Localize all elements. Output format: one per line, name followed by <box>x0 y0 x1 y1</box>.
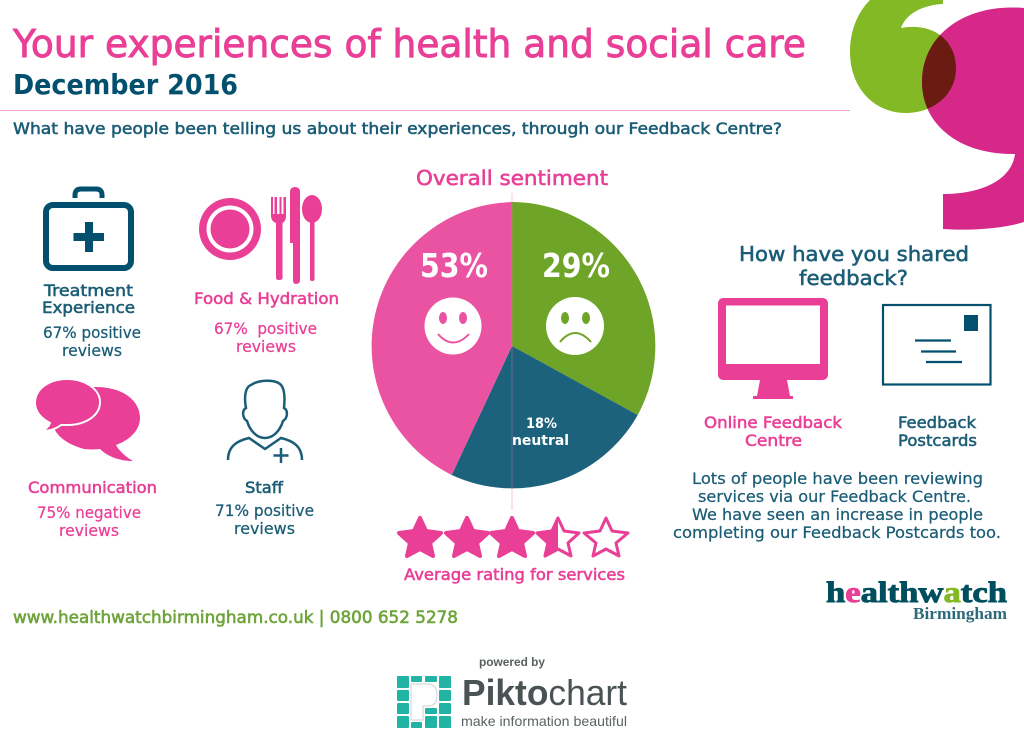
panel: food and hydration: reviews <box>236 337 296 356</box>
tagline: make information beautiful: make information beautiful <box>461 713 627 729</box>
panel: feedback postcards <box>883 305 990 450</box>
heading: how have you shared feedback: feedback? <box>799 266 908 290</box>
panel: food and hydration <box>194 187 339 356</box>
label: Feedback <box>898 413 977 432</box>
caption: powered by: powered by <box>479 655 545 669</box>
footer: powered by piktochart <box>397 655 627 729</box>
panel: treatment experience: reviews <box>62 341 122 360</box>
icon: piktochart mark <box>397 676 451 728</box>
label: Communication <box>28 478 157 497</box>
label: Online Feedback <box>704 413 843 432</box>
icon: monitor <box>718 298 828 399</box>
label: Staff <box>245 478 284 497</box>
panel: treatment experience: Experience <box>42 298 135 317</box>
label: Centre <box>745 431 802 450</box>
contact line: www.healthwatchbirmingham.co.uk | 0800 652 5278 <box>13 608 458 628</box>
caption: average rating: Average rating for services <box>404 565 625 584</box>
icon: speech bubbles <box>35 379 140 461</box>
text block: feedback summary <box>673 469 1001 542</box>
tagline: What have people been telling us about their experiences, through our Feedback Centre? <box>13 119 782 138</box>
stat: 71% positive <box>215 501 314 520</box>
icon: person with plus <box>228 381 302 463</box>
text block: feedback summary: services via our Feedback Centre. <box>698 487 971 506</box>
pie chart: sentiment <box>372 193 655 510</box>
panel: communication <box>28 379 157 540</box>
logo: healthwatch birmingham <box>826 576 1007 623</box>
stat: 67% positive <box>43 323 141 342</box>
label: Food & Hydration <box>194 289 339 308</box>
heading: overall sentiment: Overall sentiment <box>416 166 608 190</box>
panel: staff: reviews <box>234 519 295 538</box>
text block: feedback summary: Lots of people have been reviewing <box>692 469 983 488</box>
subtitle: December 2016 <box>13 68 238 101</box>
stat: 67% positive <box>214 319 317 338</box>
stat: neutral: neutral <box>512 433 569 449</box>
icon: speech marks <box>850 0 1024 230</box>
stat: negative: 29% <box>542 246 610 285</box>
stat: 75% negative <box>37 503 141 522</box>
label <box>704 413 843 450</box>
panel: communication: reviews <box>59 521 119 540</box>
label <box>898 413 977 450</box>
logo: healthwatch birmingham: Birmingham <box>913 604 1007 623</box>
label: Postcards <box>898 431 977 450</box>
stat: positive: 53% <box>420 246 488 285</box>
label: Treatment <box>43 281 133 300</box>
icon: postcard <box>883 305 990 384</box>
panel: staff <box>215 381 314 538</box>
text block: feedback summary: We have seen an increase in people <box>692 505 983 524</box>
icon: medical case <box>46 189 131 268</box>
title: Your experiences of health and social care <box>12 22 806 66</box>
stat: neutral <box>512 416 569 449</box>
icon: plate and cutlery <box>199 187 322 284</box>
panel: treatment experience <box>42 189 141 360</box>
icon: smiley <box>424 298 482 354</box>
stat: neutral: 18% <box>526 416 557 432</box>
wordmark: Piktochart <box>462 672 627 713</box>
logo: healthwatch birmingham: healthw atch <box>826 576 1007 609</box>
heading: how have you shared feedback <box>739 242 969 290</box>
star rating <box>399 518 628 556</box>
heading: how have you shared feedback: How have you shared <box>739 242 969 266</box>
panel: online feedback centre <box>704 298 843 450</box>
icon: sad face <box>546 297 604 355</box>
text block: feedback summary: completing our Feedback Postcards too. <box>673 523 1001 542</box>
